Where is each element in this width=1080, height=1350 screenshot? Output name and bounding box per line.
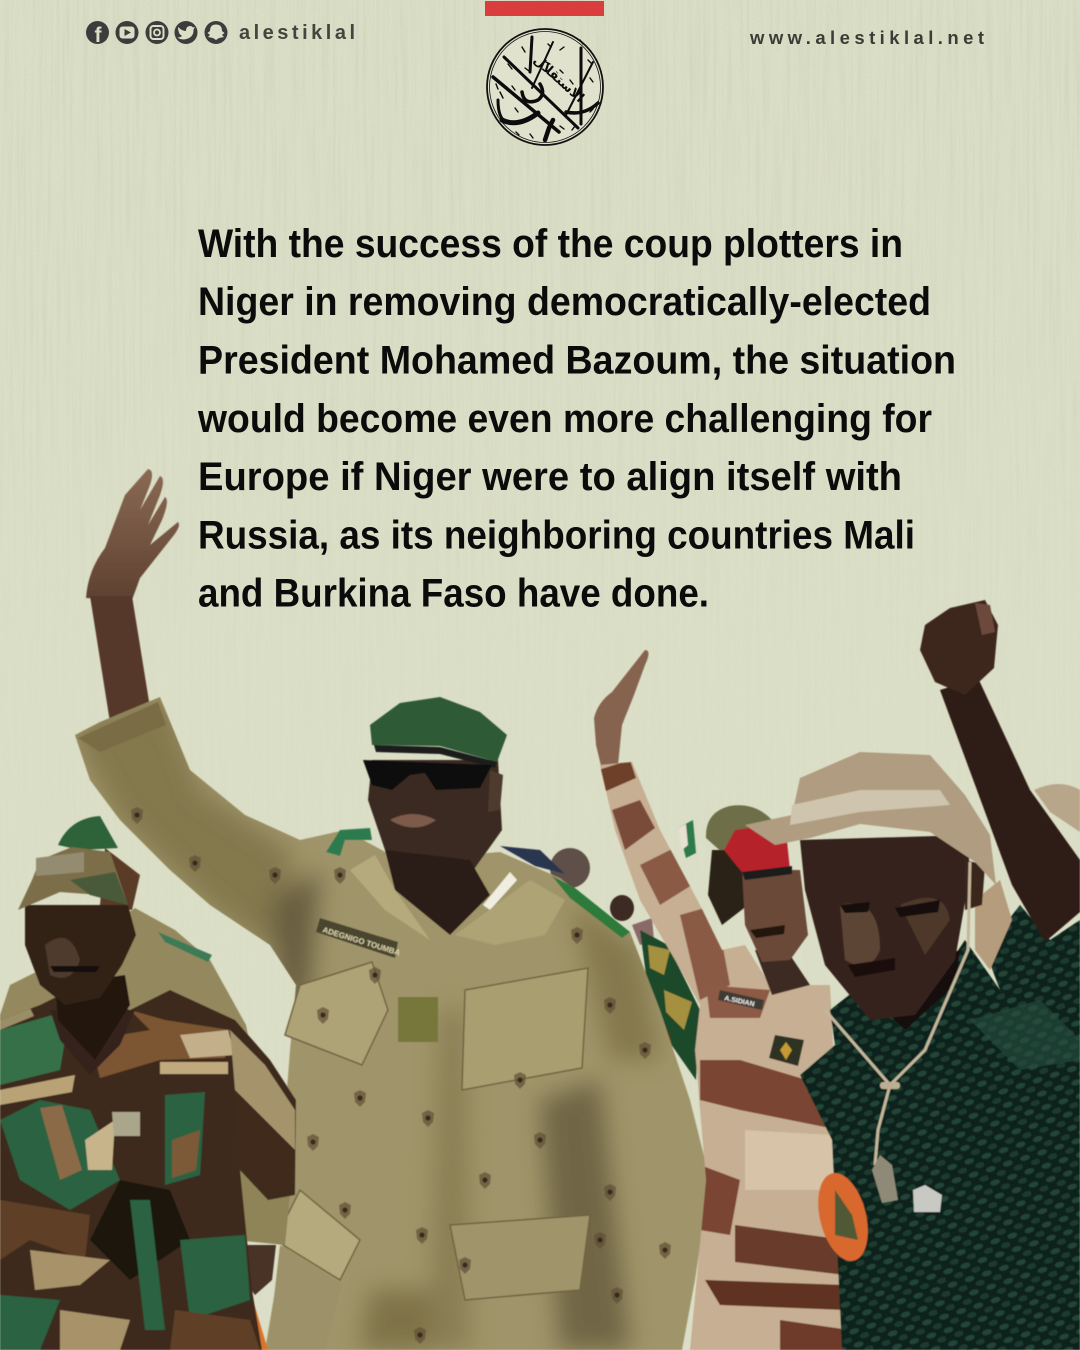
calligraphic strokes [493,37,598,140]
forearm [90,596,152,735]
uniform soft shading [70,695,660,1350]
desert camo [600,761,843,1350]
main quote text: and Burkina Faso have done. [198,572,709,616]
green beret [370,697,507,762]
white undershirt [483,872,517,910]
icon: youtube [116,21,138,44]
right chest pocket [462,968,588,1090]
logo: calligraphy roundel: الاستقلال [530,53,587,106]
handle text: alestiklal [239,22,355,44]
main quote text: President Mohamed Bazoum, the situation [198,338,956,382]
silver pin [913,1185,942,1212]
name tape: A.SIDIAN [724,995,755,1008]
lower left pocket [275,1190,360,1280]
main quote text: Europe if Niger were to align itself with [198,455,902,499]
figure: soldier in desert camo waving [590,650,860,1350]
figure: front-left soldier in woodland camo [0,847,300,1350]
figure: tan uniform behind front man [975,880,1012,970]
icon: twitter [174,21,198,44]
pendant [872,1155,898,1203]
camo uniform [0,985,300,1350]
figure: right-edge green shirt [985,905,1080,1045]
main quote text: would become even more challenging for [197,397,932,441]
main quote text: Niger in removing democratically-elected [198,280,931,324]
uniform [75,697,710,1350]
main quote text: Russia, as its neighboring countries Mali [198,514,915,558]
main quote text [197,222,956,616]
head [368,760,502,880]
photo group: soldiers [0,469,1080,1350]
website url: www.alestiklal.net [749,27,984,48]
chin cord [825,862,970,1085]
neck and face [55,975,130,1060]
main quote text: With the success of the coup plotters in [198,222,903,266]
neck and face [755,950,810,995]
raised fist [920,600,998,695]
red top bar [485,1,604,16]
figure: front-right man with hat and raised fist [745,600,1080,1350]
left dark figure [0,1130,12,1300]
sunglasses [363,760,492,790]
forearm [940,678,1080,942]
logo: calligraphy roundel [487,29,603,145]
waving hand [594,650,648,770]
social icons row [86,21,355,47]
icon: instagram [146,21,168,44]
icon: facebook [86,21,109,47]
shirt [800,940,1080,1350]
background paper [2,0,1080,469]
cord toggle [880,1082,900,1089]
field cap [18,847,128,910]
icon: facebook: f [94,24,102,47]
mouth [390,814,436,828]
figure: central officer raising hand [70,469,710,1350]
collar [350,855,430,940]
green epaulette [326,828,372,856]
insignia emblems [131,807,671,1344]
neck [860,950,960,1030]
face [800,835,970,1020]
olive patch [398,997,438,1042]
figure: far background heads and flag [500,820,696,945]
ear [965,860,985,910]
icon: snapchat [204,21,228,44]
name tape: ADEGNIGO TOUMBA [321,925,401,958]
orange badge [810,1168,876,1266]
figure: background soldier in tan with green beret [0,816,255,1070]
lower right pocket [450,1215,590,1300]
name tape [718,990,764,1010]
bush hat [745,752,996,885]
left chest pocket [285,962,388,1065]
figure: top-right distant hat [1034,784,1080,832]
figure: soldier with olive cap behind [706,805,772,925]
tan sleeve behind and hand [225,1150,292,1245]
red beret [724,822,790,876]
figure: green camo soldier between [640,930,700,1080]
raised hand [86,469,179,600]
shirt pocket flap [970,1000,1080,1070]
sleeve cuff [78,702,166,752]
rank badge [769,1035,804,1066]
